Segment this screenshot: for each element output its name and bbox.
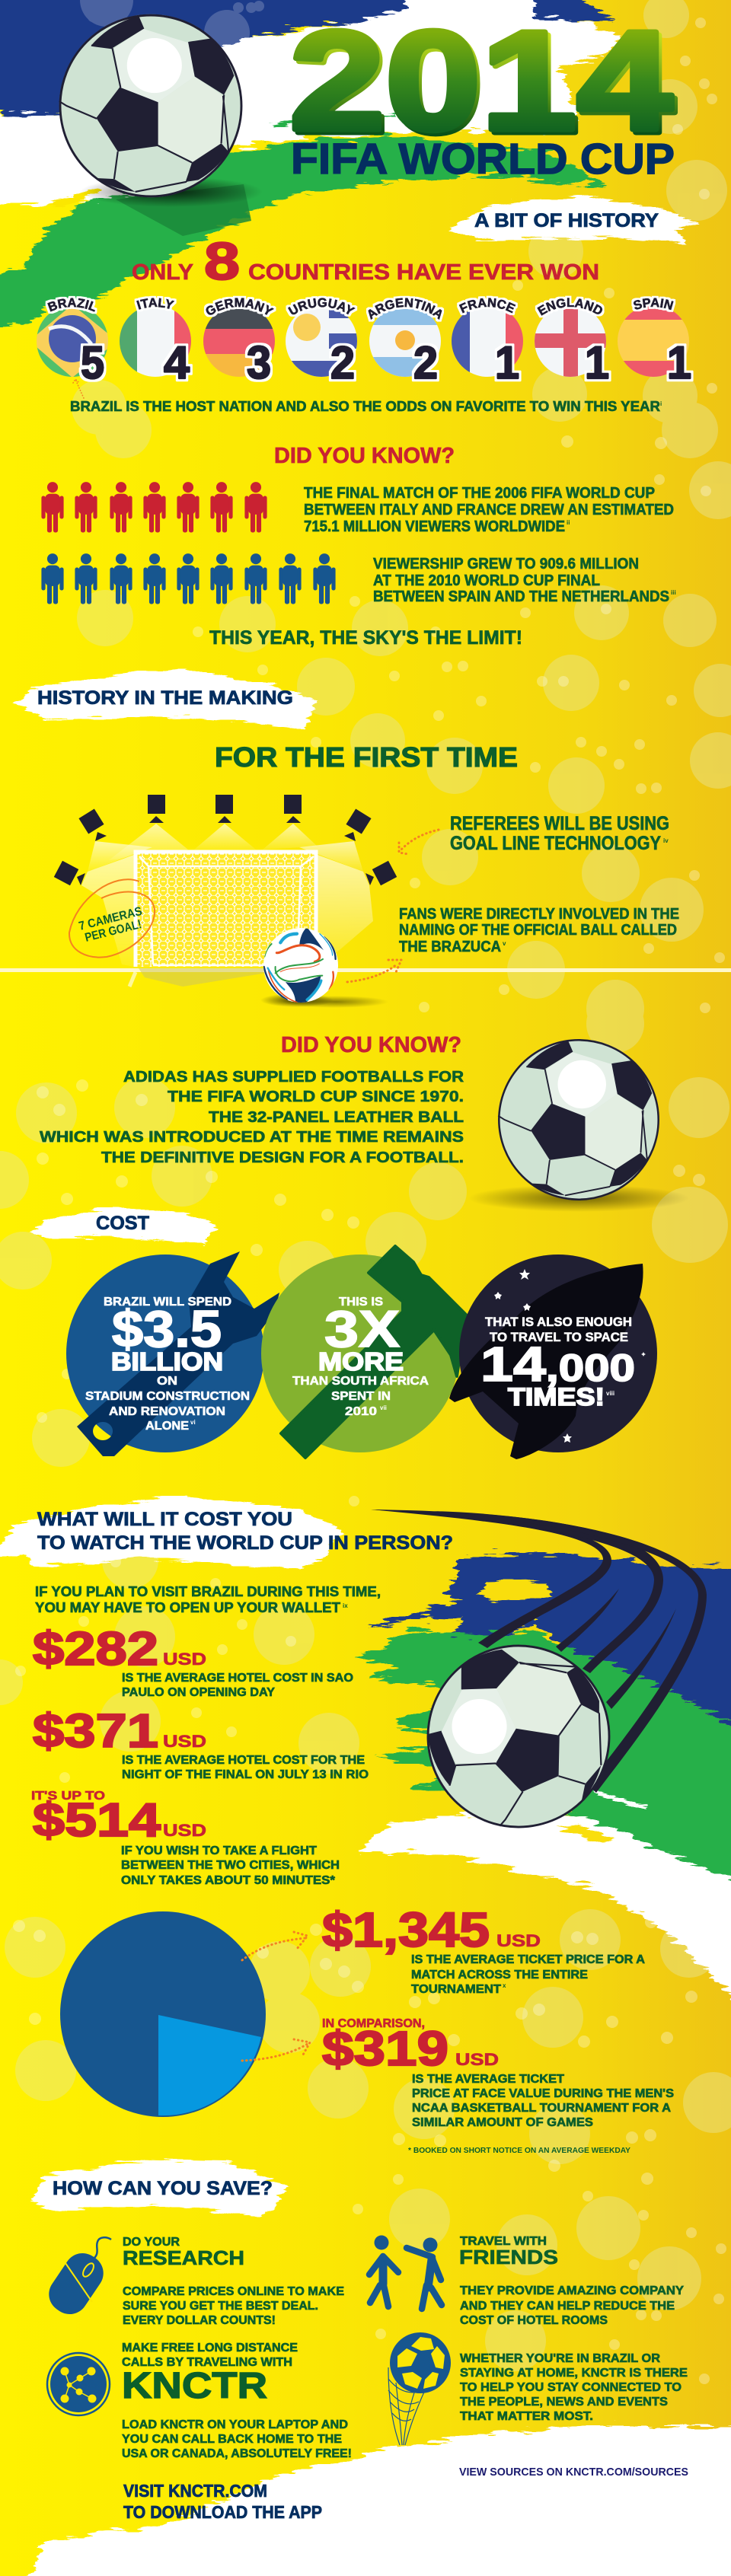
title: 2014: 2014 <box>289 2 672 160</box>
text: KNCTR calls: KNCTR <box>122 2366 267 2406</box>
pictogram: 2006 viewers <box>41 482 267 532</box>
heading: only 8 countries have ever won: COUNTRIES HAVE EVER WON <box>248 260 599 285</box>
text: friends: FRIENDS <box>459 2246 558 2268</box>
icon: hammer <box>281 1246 466 1458</box>
flag: Spain 1 <box>618 295 694 388</box>
text: 3x more: THIS IS <box>339 1296 383 1309</box>
icon: football <box>59 14 242 197</box>
stat: $1,345 ticket: MATCH ACROSS THE ENTIRE <box>411 1969 588 1981</box>
title: 2014: 2014 <box>292 5 675 163</box>
stat: $514 flight: $514 <box>33 1794 161 1847</box>
bottom white brush <box>23 2426 731 2576</box>
text: friends: COST OF HOTEL ROOMS <box>460 2314 608 2327</box>
text: KNCTR calls <box>122 2342 352 2460</box>
stat: $1,345 ticket: $1,345 <box>322 1902 490 1957</box>
stat: $514 flight: IF YOU WISH TO TAKE A FLIGHT <box>121 1844 317 1857</box>
heading: a bit of history: A BIT OF HISTORY <box>474 210 659 231</box>
text: KNCTR calls: LOAD KNCTR ON YOUR LAPTOP AND <box>122 2418 348 2431</box>
text: $3.5 billion: ALONE <box>145 1420 189 1433</box>
heading: for the first time: FOR THE FIRST TIME <box>215 741 518 773</box>
text: 2010 final: iii <box>671 589 676 596</box>
flag: France 1 <box>452 295 523 388</box>
text: Brazuca naming: THE BRAZUCA <box>399 939 501 955</box>
text: friends: THEY PROVIDE AMAZING COMPANY <box>460 2284 684 2297</box>
text: 3x more: 3X <box>324 1300 400 1358</box>
text: 2006 final: BETWEEN ITALY AND FRANCE DREW AN ESTIMATED <box>304 502 674 518</box>
stat: $1,345 ticket: IS THE AVERAGE TICKET PRICE FOR A <box>411 1953 645 1966</box>
text: friends: TRAVEL WITH <box>460 2235 547 2248</box>
panel: winning countries flags <box>37 295 694 388</box>
icon: Brazuca ball <box>260 927 388 1008</box>
heading: did you know 2: DID YOU KNOW? <box>281 1033 461 1057</box>
text: KNCTR stay connected: STAYING AT HOME, KNCTR IS THERE <box>460 2367 688 2380</box>
line on pitch <box>0 968 731 972</box>
heading: history in the making <box>14 668 317 729</box>
stat: $514 flight: BETWEEN THE TWO CITIES, WHICH <box>121 1859 340 1872</box>
stat: $514 flight: USD <box>163 1821 206 1840</box>
stat: $319 ticket: USD <box>455 2050 499 2069</box>
text: view sources: VIEW SOURCES ON KNCTR.COM/SOURCES <box>459 2466 688 2479</box>
stars <box>494 1269 646 1443</box>
stat: $319 ticket: SIMILAR AMOUNT OF GAMES <box>412 2116 593 2129</box>
text: 3x more: 2010 <box>345 1405 377 1418</box>
text: research: EVERY DOLLAR COUNTS! <box>123 2314 276 2327</box>
arrow: Brazuca <box>347 960 401 982</box>
text: KNCTR calls: USA OR CANADA, ABSOLUTELY FREE! <box>122 2447 352 2460</box>
text: KNCTR stay connected: THE PEOPLE, NEWS AND EVENTS <box>460 2396 668 2409</box>
text: research: COMPARE PRICES ONLINE TO MAKE <box>123 2285 344 2298</box>
text: wallet intro: IF YOU PLAN TO VISIT BRAZIL DURING THIS TIME, <box>35 1584 381 1599</box>
text: 3x more: SPENT IN <box>331 1390 391 1403</box>
stat: $319 ticket: IN COMPARISON, <box>322 2017 425 2030</box>
flag: Italy 4: ITALY <box>134 295 177 311</box>
stat: $1,345 ticket: x <box>503 1982 506 1989</box>
arrow: to $1,345 <box>242 1932 308 1960</box>
title: FIFA World Cup: FIFA WORLD CUP <box>291 135 675 183</box>
text: travel to space <box>480 1315 635 1411</box>
heading: did you know: DID YOU KNOW? <box>274 444 455 468</box>
arrow: Brazil note <box>73 379 84 398</box>
text: $3.5 billion: vi <box>190 1419 196 1426</box>
text: research <box>123 2236 344 2327</box>
text: travel to space: TO TRAVEL TO SPACE <box>490 1330 628 1344</box>
flag: Argentina 2 <box>366 295 445 388</box>
text: sky's the limit: THIS YEAR, THE SKY'S THE LIMIT! <box>209 627 522 649</box>
text: 2006 final <box>304 485 674 535</box>
heading: only 8 countries have ever won: ONLY <box>132 260 193 285</box>
light beams <box>81 824 373 967</box>
stat: $514 flight <box>31 1790 340 1887</box>
heading: what will it cost <box>0 1496 453 1569</box>
text: Adidas footballs: ADIDAS HAS SUPPLIED FOOTBALLS FOR <box>123 1069 464 1086</box>
text: 2010 final <box>373 556 676 605</box>
arrow: to $319 <box>242 2039 310 2061</box>
cameras <box>54 795 397 885</box>
header brush: Brazil colours <box>0 0 623 327</box>
flag: Uruguay 2 <box>286 295 358 388</box>
pictogram: 2010 viewers <box>41 553 336 604</box>
flag: Spain 1: 1 <box>667 337 691 388</box>
heading: cost: COST <box>96 1213 149 1234</box>
stat: $1,345 ticket: TOURNAMENT <box>411 1983 501 1996</box>
text: travel to space: TIMES! <box>508 1383 605 1411</box>
goal net <box>129 852 316 987</box>
stat: $282 hotel: USD <box>163 1650 206 1669</box>
text: wallet intro <box>35 1584 381 1615</box>
stat: $1,345 ticket: USD <box>496 1931 541 1950</box>
text: host nation note: BRAZIL IS THE HOST NATION AND ALSO THE ODDS ON FAVORITE TO WIN THIS YEAR <box>70 399 660 414</box>
stat: $319 ticket: PRICE AT FACE VALUE DURING THE MEN'S <box>412 2087 674 2100</box>
text: Adidas footballs: THE FIFA WORLD CUP SINCE 1970. <box>168 1089 464 1105</box>
text: KNCTR stay connected: WHETHER YOU'RE IN BRAZIL OR <box>460 2352 660 2365</box>
text: friends: AND THEY CAN HELP REDUCE THE <box>460 2300 675 2313</box>
stat: $371 hotel: $371 <box>33 1705 158 1758</box>
stat: $282 hotel: PAULO ON OPENING DAY <box>122 1686 275 1699</box>
text: Adidas footballs: THE 32-PANEL LEATHER BALL <box>209 1109 464 1126</box>
text: 3x more <box>292 1296 429 1418</box>
text: KNCTR stay connected: THAT MATTER MOST. <box>460 2410 593 2423</box>
icon: ball in net <box>388 2332 451 2445</box>
heading: how can you save: HOW CAN YOU SAVE? <box>53 2178 273 2199</box>
text: $3.5 billion: $3.5 <box>112 1300 222 1358</box>
callout: 7 cameras per goal: 7 CAMERAS <box>78 905 144 933</box>
text: host nation note: i <box>660 400 662 407</box>
flag: England 1: ENGLAND <box>535 295 605 318</box>
stat: $371 hotel: NIGHT OF THE FINAL ON JULY 13 IN RIO <box>122 1768 369 1781</box>
flag: France 1: FRANCE <box>457 295 518 315</box>
text: 2006 final: ii <box>567 519 570 526</box>
text: 2010 final: VIEWERSHIP GREW TO 909.6 MILLION <box>373 556 639 572</box>
flag: Germany 3 <box>203 295 276 388</box>
text: goal line technology: iv <box>663 837 669 844</box>
text: Adidas footballs: WHICH WAS INTRODUCED AT THE TIME REMAINS <box>40 1129 464 1146</box>
text: KNCTR calls: CALLS BY TRAVELING WITH <box>122 2356 292 2369</box>
icon: rocket <box>449 1264 643 1459</box>
arrow: goal line <box>399 830 439 854</box>
text: Brazuca naming: v <box>503 940 506 947</box>
text: Brazuca naming: NAMING OF THE OFFICIAL BALL CALLED <box>399 922 677 939</box>
footnote: * BOOKED ON SHORT NOTICE ON AN AVERAGE WEEKDAY <box>408 2146 630 2155</box>
callout: 7 cameras per goal: PER GOAL! <box>84 918 143 945</box>
flag: Argentina 2: 2 <box>413 337 438 388</box>
text: wallet intro: YOU MAY HAVE TO OPEN UP YOUR WALLET <box>35 1600 340 1615</box>
stat: $319 ticket: NCAA BASKETBALL TOURNAMENT FOR A <box>412 2102 671 2115</box>
stat: $319 ticket <box>322 2017 674 2129</box>
stat: $1,345 ticket <box>322 1902 645 1996</box>
flag: Spain 1: SPAIN <box>631 295 676 312</box>
heading: what will it cost: WHAT WILL IT COST YOU <box>37 1509 292 1530</box>
text: 2006 final: 715.1 MILLION VIEWERS WORLDWIDE <box>304 518 565 535</box>
flag: Uruguay 2: 2 <box>330 337 355 388</box>
speed lines <box>371 1510 707 1793</box>
heading: cost <box>30 1207 217 1244</box>
text: Adidas footballs: THE DEFINITIVE DESIGN FOR A FOOTBALL. <box>101 1149 464 1166</box>
text: 3x more: MORE <box>318 1347 404 1376</box>
text: KNCTR calls: YOU CAN CALL BACK HOME TO THE <box>122 2433 342 2446</box>
stat: $371 hotel <box>33 1705 369 1781</box>
text: KNCTR stay connected: TO HELP YOU STAY CONNECTED TO <box>460 2381 682 2394</box>
text: KNCTR calls: MAKE FREE LONG DISTANCE <box>122 2342 298 2354</box>
text: travel to space: THAT IS ALSO ENOUGH <box>485 1315 632 1329</box>
heading: a bit of history <box>449 196 700 244</box>
icon: wrench <box>77 1251 279 1456</box>
flag: England 1: 1 <box>585 337 609 388</box>
text: visit KNCTR.com: TO DOWNLOAD THE APP <box>123 2502 322 2522</box>
flag: Argentina 2: ARGENTINA <box>366 295 445 322</box>
text: 2006 final: THE FINAL MATCH OF THE 2006 FIFA WORLD CUP <box>304 485 655 502</box>
flag: Germany 3: 3 <box>247 337 271 388</box>
text: $3.5 billion: ON <box>157 1375 177 1388</box>
stat: $282 hotel <box>33 1623 353 1699</box>
chart: ticket price pie <box>60 1911 266 2117</box>
illustration: goal with cameras <box>0 795 731 987</box>
text: $3.5 billion: BILLION <box>111 1347 223 1376</box>
text: $3.5 billion: STADIUM CONSTRUCTION <box>85 1390 250 1403</box>
stat: $514 flight: IT'S UP TO <box>31 1790 105 1803</box>
text: Brazuca naming <box>399 906 679 955</box>
text: Brazuca naming: FANS WERE DIRECTLY INVOLVED IN THE <box>399 906 679 923</box>
text: research: SURE YOU GET THE BEST DEAL. <box>123 2300 318 2313</box>
heading: only 8 countries have ever won <box>132 231 599 291</box>
heading: what will it cost: TO WATCH THE WORLD CUP IN PERSON? <box>37 1532 453 1554</box>
text: $3.5 billion <box>85 1296 250 1433</box>
text: 3x more: vii <box>380 1404 387 1411</box>
flag: Brazil 5: 5 <box>81 337 104 388</box>
text: wallet intro: ix <box>343 1602 348 1609</box>
illustration: flying ball with brush <box>358 1510 731 2013</box>
flag: Brazil 5: BRAZIL <box>46 295 97 314</box>
text: 2010 final: AT THE 2010 WORLD CUP FINAL <box>373 572 600 589</box>
text: travel to space: 14 <box>480 1337 546 1392</box>
stat: $282 hotel: $282 <box>33 1623 158 1675</box>
text: $3.5 billion: BRAZIL WILL SPEND <box>104 1296 231 1309</box>
text: Adidas footballs <box>40 1069 464 1166</box>
flag: Brazil 5 <box>37 295 108 388</box>
text: goal line technology: GOAL LINE TECHNOLOGY <box>450 833 661 854</box>
text: $3.5 billion: AND RENOVATION <box>109 1405 225 1418</box>
text: 2010 final: BETWEEN SPAIN AND THE NETHERLANDS <box>373 588 669 605</box>
text: travel to space: viii <box>606 1390 614 1397</box>
stat: $371 hotel: IS THE AVERAGE HOTEL COST FOR THE <box>122 1754 365 1767</box>
icon: football 2 <box>468 1039 689 1212</box>
heading: how can you save <box>30 2160 287 2216</box>
stat: $282 hotel: IS THE AVERAGE HOTEL COST IN SAO <box>122 1672 353 1685</box>
icon: KNCTR logo <box>47 2353 110 2415</box>
text: goal line technology: REFEREES WILL BE USING <box>450 813 669 834</box>
flag: England 1 <box>535 295 611 388</box>
text: 3x more: THAN SOUTH AFRICA <box>292 1375 429 1388</box>
text: goal line technology <box>450 813 669 854</box>
text: research: DO YOUR <box>123 2236 180 2249</box>
stat: $514 flight: ONLY TAKES ABOUT 50 MINUTES* <box>121 1874 336 1887</box>
flag: Italy 4: 4 <box>164 337 190 388</box>
heading: history in the making: HISTORY IN THE MAKING <box>37 687 293 709</box>
text: friends <box>459 2235 684 2327</box>
stat: $371 hotel: USD <box>163 1732 206 1751</box>
panel: 14,000 times <box>449 1255 657 1459</box>
icon: mouse <box>42 2237 111 2321</box>
flag: Uruguay 2: URUGUAY <box>286 295 358 317</box>
flag: Germany 3: GERMANY <box>204 295 276 317</box>
text: KNCTR stay connected <box>460 2352 688 2423</box>
text: visit KNCTR.com: VISIT KNCTR.COM <box>123 2481 267 2501</box>
panel: Brazil spend <box>66 1251 279 1456</box>
callout: 7 cameras per goal <box>69 879 155 958</box>
heading: only 8 countries have ever won: 8 <box>204 231 240 291</box>
icon: friends <box>369 2235 442 2309</box>
text: visit KNCTR.com <box>123 2481 322 2522</box>
stat: $319 ticket: IS THE AVERAGE TICKET <box>412 2073 564 2086</box>
stat: $319 ticket: $319 <box>322 2021 448 2076</box>
text: travel to space: ,000 <box>546 1347 635 1389</box>
flag: Italy 4 <box>120 295 193 388</box>
text: research: RESEARCH <box>123 2246 244 2269</box>
panel: 3x more <box>261 1246 466 1458</box>
flag: France 1: 1 <box>495 337 519 388</box>
